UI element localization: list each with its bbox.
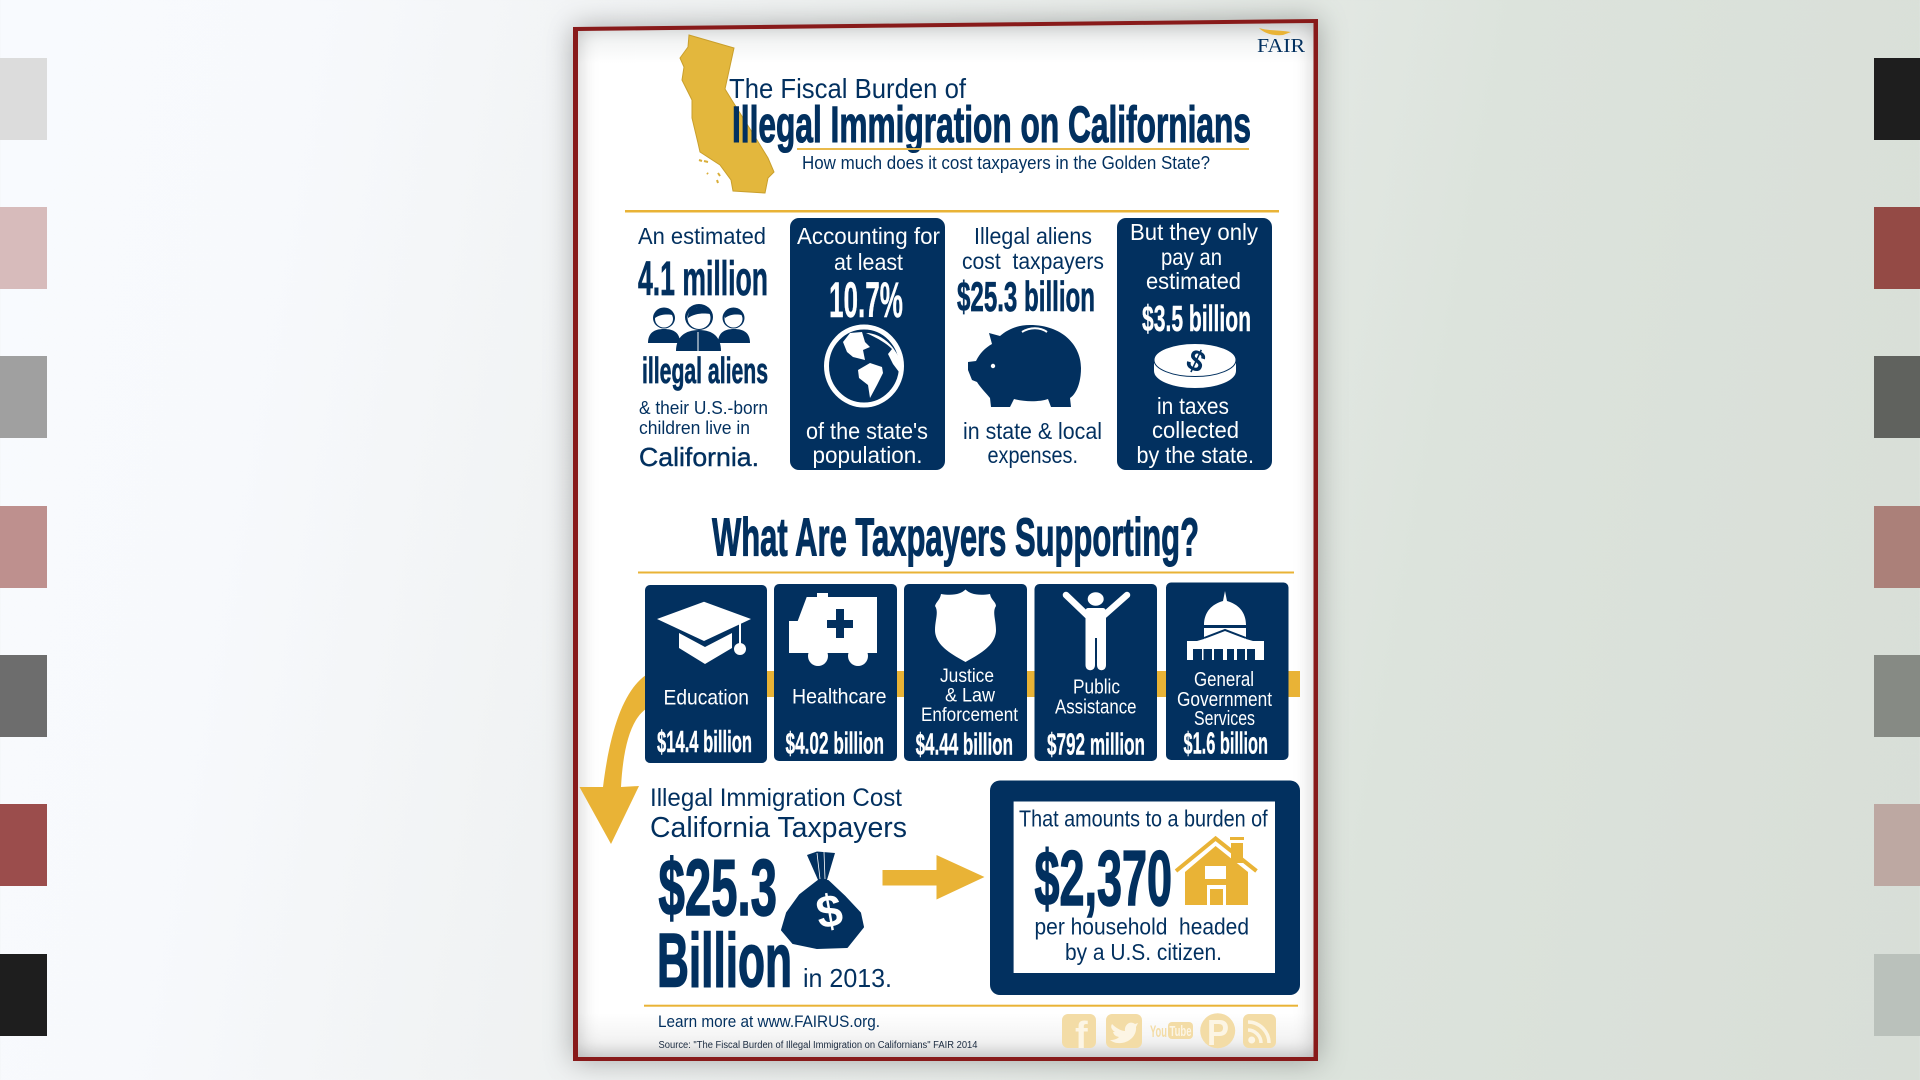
left colour swatches	[0, 58, 47, 1036]
panel: share of population: of the state's	[806, 418, 928, 444]
icon: capitol building	[1187, 591, 1264, 660]
total cost block: $25.3	[658, 843, 777, 932]
stat column: population: & their U.S.-born	[639, 398, 768, 418]
panel: general government services: Government	[1177, 689, 1272, 711]
FAIR logo: FAIR	[1257, 36, 1305, 57]
panel: public assistance: Assistance	[1055, 696, 1136, 718]
panel: healthcare	[774, 584, 897, 761]
total cost block	[650, 784, 907, 1004]
panel: taxes paid: But they only	[1130, 219, 1258, 245]
map of California	[680, 35, 774, 193]
icon: coin: $	[1181, 343, 1211, 380]
title block: How much does it cost taxpayers in the Golden State?	[802, 152, 1210, 173]
gold band behind categories	[760, 671, 1300, 697]
panel: healthcare: $4.02 billion	[786, 725, 884, 760]
stat column: population: illegal aliens	[642, 350, 768, 391]
panel: household burden: by a U.S. citizen.	[1065, 939, 1222, 965]
stat column: total cost: $25.3 billion	[957, 273, 1095, 320]
icon: globe	[826, 327, 902, 405]
footer: learn more: Learn more at www.FAIRUS.org.	[658, 1013, 880, 1031]
total cost block: in 2013.	[803, 963, 892, 993]
icon: youtube: You	[1150, 1022, 1167, 1041]
icon: money bag	[782, 852, 863, 948]
icon: youtube: Tube	[1170, 1023, 1192, 1040]
panel: healthcare: Healthcare	[792, 686, 886, 708]
total cost block: Billion	[657, 918, 792, 1004]
total cost block: California Taxpayers	[650, 812, 907, 844]
panel: justice and law enforcement: $4.44 billion	[916, 726, 1013, 762]
panel: education	[645, 585, 767, 763]
icon: graduation cap	[657, 602, 751, 664]
panel: share of population	[790, 218, 945, 470]
icon: piggy bank	[968, 325, 1081, 407]
panel: taxes paid: $3.5 billion	[1142, 298, 1251, 339]
arrow to burden panel	[882, 855, 984, 900]
social media icons	[1062, 1012, 1276, 1057]
icon: person	[1066, 592, 1127, 670]
panel: taxes paid: estimated	[1146, 268, 1241, 294]
panel: public assistance: $792 million	[1047, 726, 1145, 762]
panel: general government services: Services	[1194, 708, 1255, 730]
icon: twitter	[1106, 1014, 1142, 1048]
icon: facebook: f	[1075, 1015, 1088, 1057]
panel: justice and law enforcement: & Law	[945, 686, 995, 707]
panel: public assistance: Public	[1073, 676, 1120, 698]
panel: taxes paid: collected	[1152, 417, 1239, 443]
stat column: total cost: expenses.	[988, 442, 1078, 468]
icon: pinterest	[1200, 1012, 1235, 1053]
icon: money bag: $	[812, 883, 846, 939]
stat column: total cost: cost taxpayers	[962, 248, 1104, 274]
panel: general government services: $1.6 billion	[1184, 725, 1268, 760]
panel: household burden: $2,370	[1034, 834, 1172, 922]
icon: pinterest: P	[1207, 1012, 1229, 1053]
panel: share of population: 10.7%	[829, 272, 903, 328]
panel: share of population: Accounting for	[797, 223, 940, 249]
right colour swatches	[1874, 58, 1920, 1036]
total cost block: Illegal Immigration Cost	[650, 784, 902, 812]
title block	[729, 73, 1251, 173]
title block: Illegal Immigration on Californians	[732, 96, 1251, 153]
stat column: population: California.	[639, 442, 759, 472]
panel: taxes paid: pay an	[1161, 244, 1222, 270]
panel: share of population: population.	[812, 442, 922, 468]
panel: taxes paid: by the state.	[1136, 442, 1254, 468]
icon: house	[1176, 837, 1256, 905]
icon: shield	[935, 590, 996, 662]
stat column: total cost	[957, 223, 1104, 468]
icon: coin	[1154, 343, 1236, 388]
panel: education: Education	[664, 687, 749, 710]
stat column: population: children live in	[639, 418, 750, 438]
stat column: total cost: Illegal aliens	[974, 223, 1092, 249]
panel: justice and law enforcement: Justice	[940, 666, 994, 687]
icon: ambulance	[789, 593, 877, 666]
stat column: population: An estimated	[638, 223, 766, 249]
footer: source: Source: "The Fiscal Burden of Illegal Immigration on Californians" FAIR 2014	[658, 1040, 978, 1051]
poster frame	[556, 3, 1334, 1078]
panel: general government services	[1166, 582, 1288, 760]
FAIR logo	[1257, 28, 1305, 57]
panel: household burden: That amounts to a burden of	[1019, 806, 1268, 832]
panel: justice and law enforcement	[904, 584, 1027, 762]
panel: household burden: per household headed	[1034, 914, 1249, 940]
panel: household burden	[990, 780, 1300, 995]
icon: rss	[1243, 1014, 1276, 1048]
stat column: total cost: in state & local	[963, 418, 1102, 444]
panel: general government services: General	[1194, 669, 1254, 691]
icon: people	[648, 304, 750, 351]
heading: what are taxpayers supporting: What Are Taxpayers Supporting?	[712, 508, 1199, 568]
panel: education: $14.4 billion	[657, 724, 752, 759]
title block: The Fiscal Burden of	[729, 73, 966, 104]
panel: public assistance	[1034, 584, 1157, 762]
panel: taxes paid: in taxes	[1157, 393, 1229, 419]
panel: share of population: at least	[834, 249, 904, 275]
curved arrow down	[580, 675, 646, 844]
stat column: population	[638, 223, 768, 472]
panel: taxes paid	[1117, 218, 1272, 470]
stat column: population: 4.1 million	[638, 253, 768, 306]
panel: justice and law enforcement: Enforcement	[921, 705, 1019, 726]
icon: facebook	[1062, 1014, 1096, 1057]
